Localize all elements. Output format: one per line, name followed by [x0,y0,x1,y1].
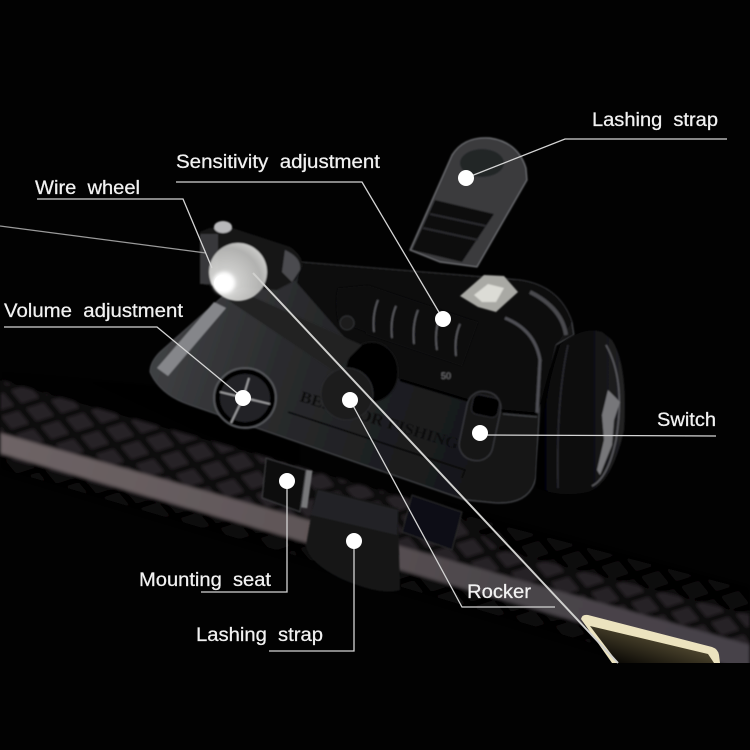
callout: wire wheel [35,178,230,291]
right shoulder highlights [505,318,540,413]
carbon fishing rod [0,380,750,663]
wire wheel assembly [200,221,302,301]
callout: volume adjustment [4,301,251,406]
sensitivity roller [336,285,478,366]
seam line [400,380,537,414]
white slope highlight [157,302,226,376]
alarm body [150,262,574,503]
rocker [228,293,398,420]
scale number: 50 [441,371,451,381]
bottom lashing strap [306,488,400,592]
branding on body: BELL FOR FISHING [298,389,461,453]
clear LED gem [460,275,518,312]
dark top cover [297,262,572,413]
mounting seat [262,458,462,550]
switch [456,388,504,464]
callout: mounting seat [139,473,295,592]
callout: switch [472,410,716,441]
callout: rocker [342,392,555,607]
callout: sensitivity adjustment [176,152,451,327]
volume dial [214,368,276,428]
fishing line [0,226,618,663]
side knob [536,331,625,494]
strap ribs [412,200,494,262]
callout: lashing strap top: Lashing strap [592,110,718,131]
callout: mounting seat: Mounting seat [139,570,272,591]
callout: rocker: Rocker [467,582,532,603]
label panel outline [288,412,465,478]
callout: lashing strap top [458,110,727,186]
top lashing strap [410,138,527,267]
callout: wire wheel: Wire wheel [35,178,140,199]
callout: switch: Switch [657,410,716,431]
callout: lashing strap bottom [196,533,362,651]
callout: lashing strap bottom: Lashing strap [196,625,323,646]
gold rod label [581,615,720,663]
callout: sensitivity adjustment: Sensitivity adjustment [176,152,381,173]
callout: volume adjustment: Volume adjustment [4,301,184,322]
